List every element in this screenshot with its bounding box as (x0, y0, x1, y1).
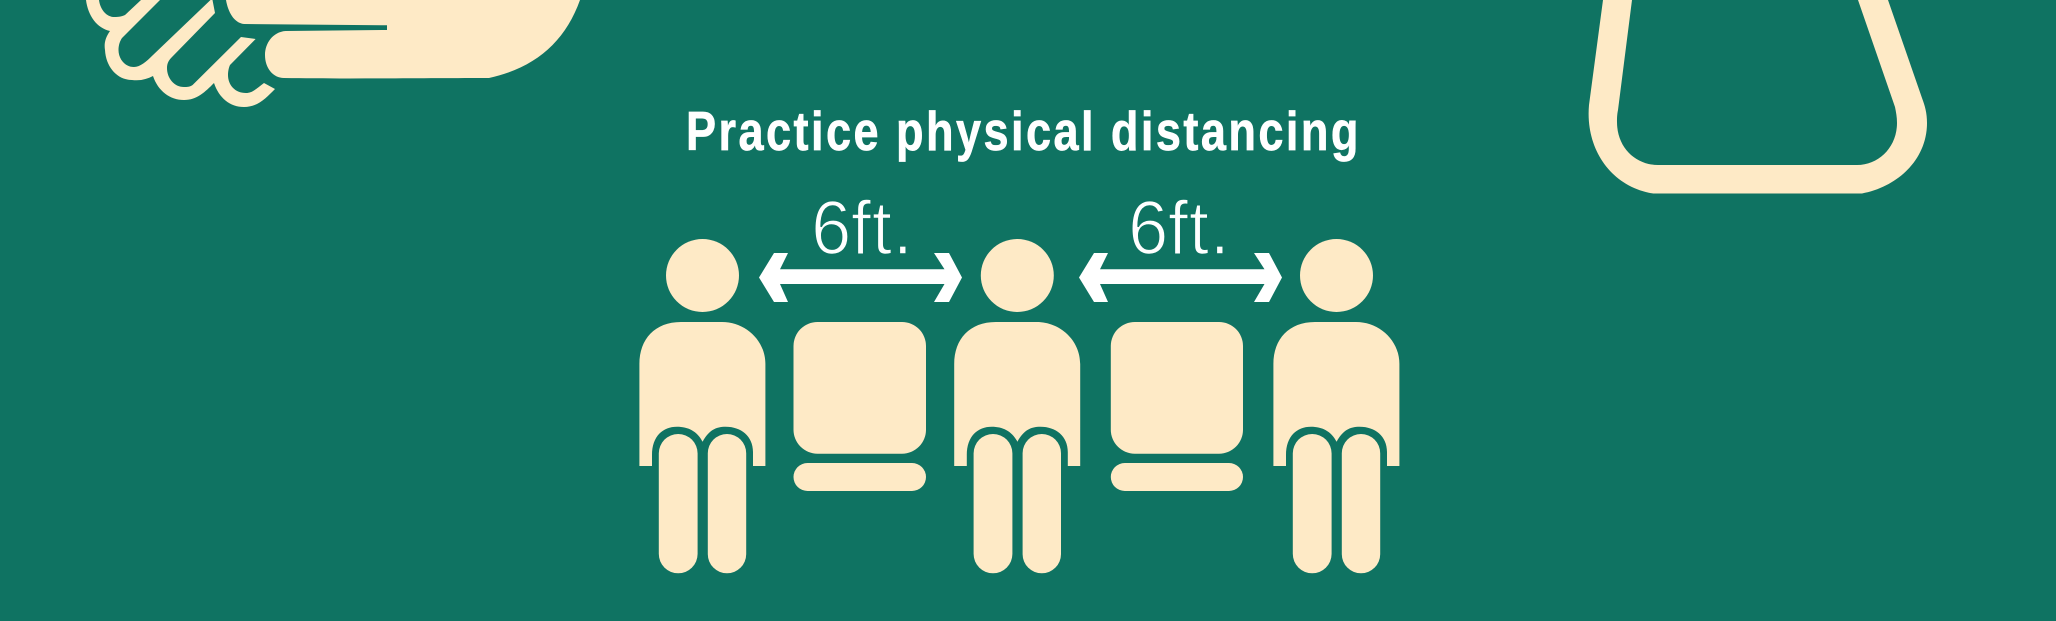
person: left (639, 239, 765, 573)
person: right (1273, 239, 1399, 573)
distance label: left 6ft.: 6ft. (811, 185, 913, 270)
heading: Practice physical distancing (686, 100, 1361, 162)
empty seat: left (794, 322, 926, 491)
icon: hand cropped at top left (86, 0, 580, 107)
arrow: left double-headed (759, 253, 962, 302)
arrow: right double-headed (1079, 253, 1282, 302)
distance label: right 6ft.: 6ft. (1128, 185, 1230, 270)
empty seat: right (1111, 322, 1243, 491)
person: middle (954, 239, 1080, 573)
icon: flask outline cropped at top right (1589, 0, 1927, 194)
